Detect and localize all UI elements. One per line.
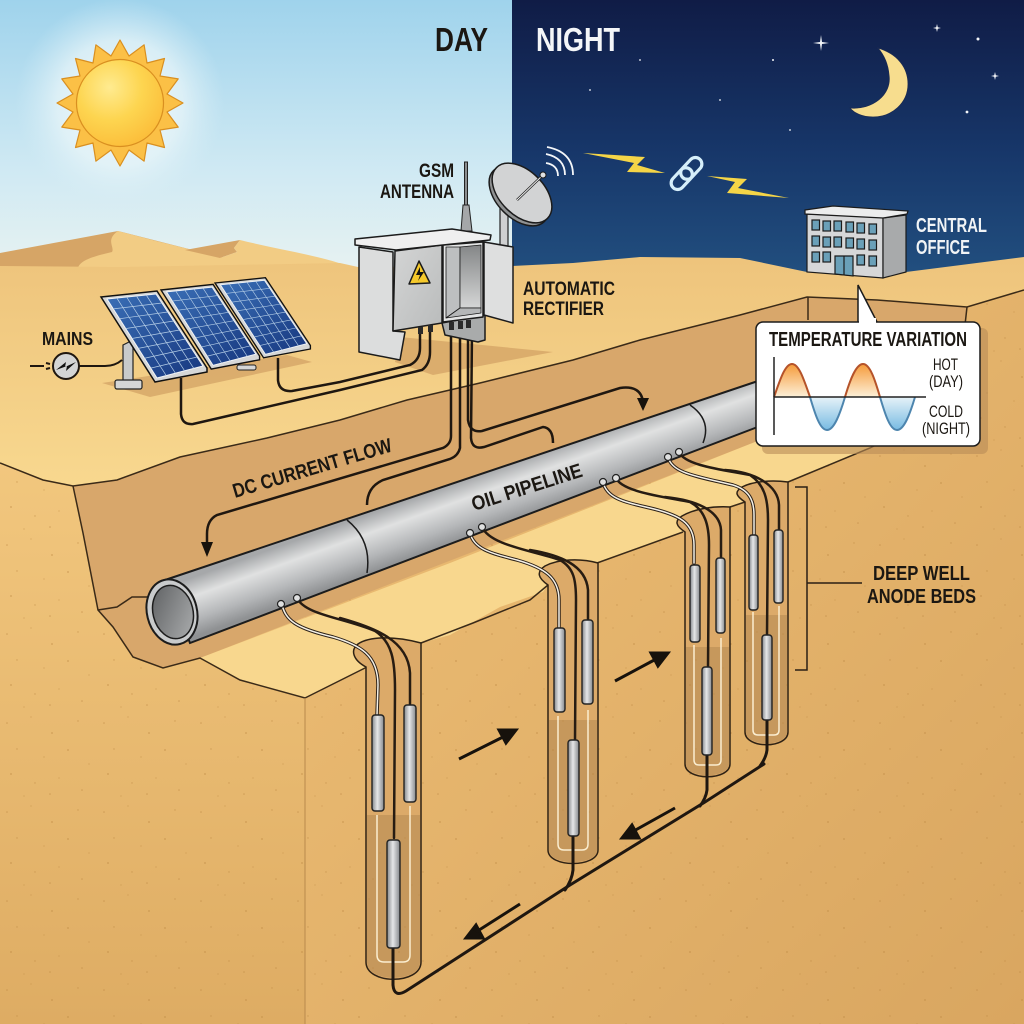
heading: DAY: DAY [435,21,488,58]
label: GSM antenna: GSM [419,161,454,182]
anode cables [278,448,779,838]
cabinet front [393,245,442,331]
arrowhead: DC flow right [637,398,649,411]
label: automatic rectifier [523,279,615,320]
inner back panel [460,245,481,308]
arrowhead: DC flow left [201,542,213,557]
solar panel 1 [101,291,207,382]
well 4 [737,481,788,745]
anodes [372,530,783,948]
mains supply: MAINS [42,329,93,349]
cabinet base [442,315,485,342]
label: automatic rectifier: RECTIFIER [523,299,604,320]
arrow: return current 1 [466,904,520,938]
label: hot day [929,355,963,391]
cabinet interior [443,242,483,322]
solar shadow [102,355,312,397]
mains supply [30,329,122,379]
icon: lightning bolt right [707,176,789,198]
solar panel array [101,278,310,389]
label: DC current flow: DC CURRENT FLOW [230,435,395,503]
rectifier shadow [395,337,553,375]
label: central office: CENTRAL [916,215,987,237]
distant dunes [0,231,360,272]
central office building [805,206,908,278]
return cable below wells [393,720,767,993]
night sky [512,0,1024,280]
label: hot day: HOT [933,355,958,374]
panel stand [115,340,256,389]
cabinet side [359,247,405,360]
heading: NIGHT: NIGHT [536,21,620,58]
label: cold night: COLD [929,402,963,421]
icon: lightning bolt left [583,153,665,173]
open door [484,242,513,323]
well 3 [677,507,730,777]
satellite dish [478,152,563,248]
label: cold night: (NIGHT) [922,419,970,438]
label: automatic rectifier: AUTOMATIC [523,279,615,300]
icon: signal waves [546,147,573,176]
solar panel 2 [161,284,260,369]
solar panel 3 [215,278,310,358]
solar cables [181,327,430,424]
well 2 [539,560,598,864]
trench edge lines [0,290,1024,1024]
cabinet roof [355,229,491,250]
arrow: return current 2 [622,808,675,838]
desert surface [0,257,1024,486]
inner side wall [446,247,460,318]
label: hot day: (DAY) [929,372,963,391]
temperature wave chart [774,357,926,435]
icon: crescent moon [850,48,908,117]
automatic rectifier cabinet [355,229,513,360]
day sky [0,0,512,280]
lower left ground face [0,460,306,1024]
icon: stars [589,24,999,131]
label: central office [916,215,987,259]
sun glow [15,0,225,208]
GSM antenna [461,162,472,231]
label: deep well anode beds: DEEP WELL [873,563,970,585]
label: oil pipeline: OIL PIPELINE [469,460,585,516]
lower right ground face [305,285,1024,1024]
label: deep well anode beds [867,563,976,608]
cable glands [418,320,471,334]
label: central office: OFFICE [916,237,970,259]
icon: warning triangle [409,261,430,284]
icon: sun [57,40,183,166]
arrow: current into pipe 1 [459,730,516,759]
icon: chain link [668,155,705,192]
arrow: current into pipe 2 [615,653,668,681]
panel: temperature variation [756,285,988,454]
label: deep well anode beds: ANODE BEDS [867,586,976,608]
label: GSM antenna [380,161,454,203]
label: GSM antenna: ANTENNA [380,182,454,203]
label: cold night [922,402,970,438]
DC cables to pipe [207,325,643,545]
inner floor [446,308,481,318]
deep well bracket [795,487,862,670]
near ledge of trench [200,335,967,698]
trench [73,297,967,668]
oil pipeline [140,378,770,650]
well 1 [354,638,421,979]
